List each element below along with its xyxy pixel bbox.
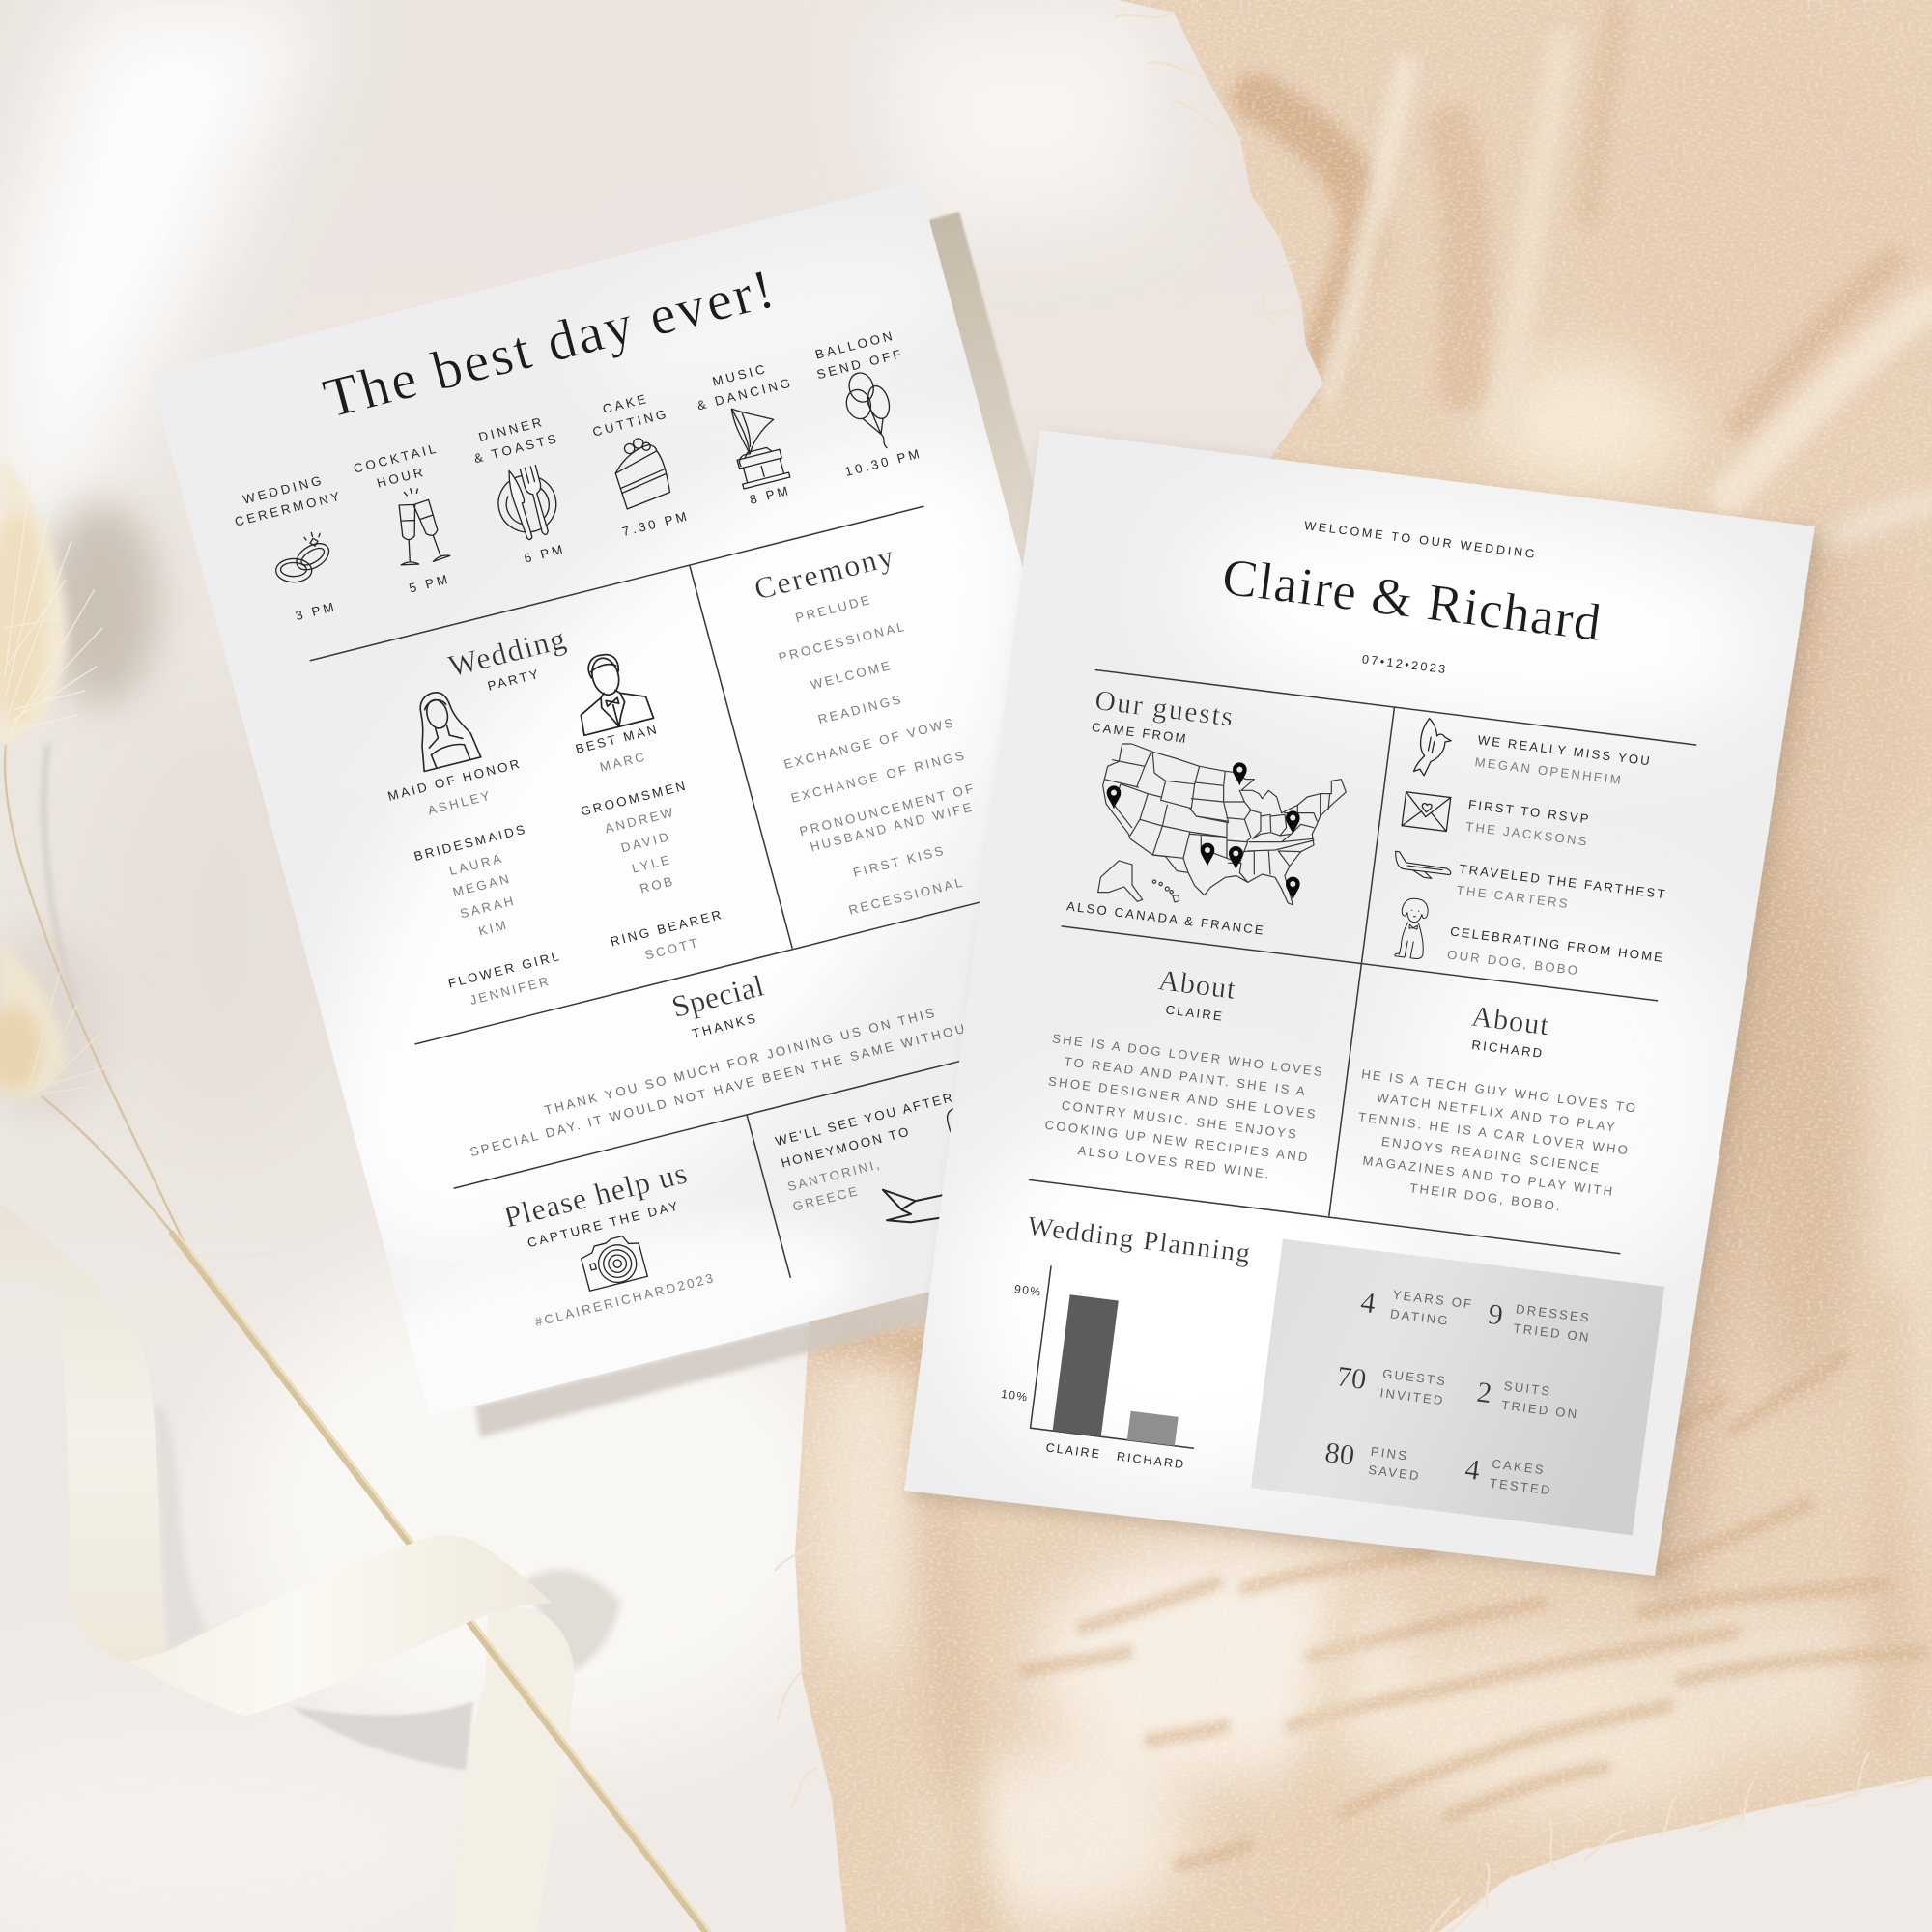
panel: guest superlatives: FIRST TO RSVP (1467, 797, 1592, 827)
panel: about claire: SHE IS A DOG LOVER WHO LOVES (1051, 1031, 1325, 1079)
panel: wedding stats box: TRIED ON (1513, 1321, 1591, 1345)
panel: about richard: MAGAZINES AND TO PLAY WITH (1362, 1153, 1615, 1199)
panel: wedding party: Wedding (444, 621, 571, 683)
step: balloon send off: SEND OFF (815, 346, 905, 382)
ribbon lower band (453, 1607, 575, 1932)
bar chart: CLAIRE (1045, 1441, 1102, 1462)
icon: dried pampas grass (0, 454, 190, 1256)
icon: bride (405, 686, 481, 772)
panel: about richard: HE IS A TECH GUY WHO LOVES TO (1360, 1066, 1638, 1116)
step: balloon send off: BALLOON (813, 328, 896, 362)
panel: ceremony: PROCESSIONAL (777, 619, 908, 665)
shadow of left card: right strip (923, 212, 1038, 580)
bar chart: RICHARD (1116, 1450, 1186, 1471)
heading (1213, 510, 1610, 695)
panel: ceremony: WELCOME (809, 658, 894, 693)
panel: capture the day: #CLAIRERICHARD2023 (533, 1270, 717, 1329)
panel: about claire: CONTRY MUSIC. SHE ENJOYS (1061, 1098, 1299, 1142)
panel: wedding party: FLOWER GIRL (446, 949, 563, 991)
icon: dog (1395, 897, 1430, 959)
panel: wedding party: KIM (477, 918, 510, 939)
panel: our guests: ALSO CANADA & FRANCE (1065, 898, 1266, 938)
heading: 07•12•2023 (1361, 652, 1448, 676)
step: music and dancing: 8 PM (748, 483, 792, 507)
step: cake cutting (586, 387, 697, 540)
panel: about richard: THEIR DOG, BOBO. (1408, 1180, 1563, 1214)
icon: camera (578, 1233, 647, 1291)
cloth weave texture (795, 0, 1932, 1932)
panel: honeymoon: GREECE (791, 1183, 861, 1214)
step: cake cutting: CAKE (601, 391, 650, 416)
bar chart (994, 1262, 1214, 1472)
panel: wedding stats box: YEARS OF (1392, 1287, 1474, 1312)
satin ribbon (0, 1204, 552, 1717)
panel: guest superlatives: WE REALLY MISS YOU (1477, 732, 1653, 769)
panel: about claire (1037, 952, 1336, 1186)
icon: envelope (1402, 792, 1451, 831)
card: claire and richard (904, 430, 1815, 1576)
panel: wedding stats box: DRESSES (1515, 1301, 1592, 1325)
panel: about claire: ALSO LOVES RED WINE. (1077, 1143, 1272, 1181)
panel: special thanks: Special (668, 969, 768, 1024)
panel: ceremony: HUSBAND AND WIFE (809, 799, 976, 854)
panel: wedding stats box: 80 (1323, 1435, 1356, 1472)
panel: ceremony: EXCHANGE OF VOWS (782, 715, 957, 772)
panel: special thanks: SPECIAL DAY. IT WOULD NOT HAVE BEEN THE SAME WITHOUT YOU. (469, 1007, 1024, 1159)
step: dinner and toasts: 6 PM (523, 542, 567, 566)
panel: special thanks (442, 909, 1024, 1159)
panel: about richard: ENJOYS READING SCIENCE (1380, 1134, 1602, 1176)
step: cake cutting: 7.30 PM (620, 508, 691, 539)
panel: wedding stats box: TESTED (1489, 1476, 1553, 1497)
panel: about claire: CLAIRE (1165, 1002, 1225, 1024)
shadow of left card: bottom strip (475, 1273, 1014, 1437)
icon: gramophone (723, 399, 790, 489)
step: cake cutting: CUTTING (591, 406, 670, 440)
panel: about claire: SHOE DESIGNER AND SHE LOVES (1047, 1074, 1319, 1122)
panel: wedding party: SCOTT (643, 935, 701, 962)
step: cocktail hour: COCKTAIL (352, 440, 440, 476)
panel: about claire: COOKING UP NEW RECIPIES AND (1044, 1118, 1311, 1165)
icon: dove (1413, 718, 1454, 779)
dried stems (172, 1234, 713, 1932)
panel: wedding stats box: CAKES (1492, 1457, 1547, 1477)
step: dinner and toasts (468, 412, 589, 571)
heading: Claire & Richard (1219, 547, 1605, 652)
step: cocktail hour: HOUR (375, 465, 427, 491)
panel: honeymoon: WE'LL SEE YOU AFTER OUR (774, 1080, 996, 1149)
panel: ceremony: PRONOUNCEMENT OF (798, 781, 978, 838)
panel: ceremony: READINGS (816, 692, 904, 726)
panel: wedding planning chart: Wedding Planning (1026, 1211, 1253, 1269)
cloth upper folds (1256, 13, 1932, 541)
icon: champagne flutes (383, 483, 450, 569)
step: wedding ceremony: WEDDING (242, 472, 326, 507)
panel: ceremony: EXCHANGE OF RINGS (789, 748, 968, 806)
panel: wedding party: RING BEARER (609, 907, 724, 949)
step: music and dancing: & DANCING (696, 375, 795, 412)
cloth fringe (776, 13, 1932, 1932)
panel: wedding stats box: 4 (1359, 1286, 1378, 1320)
step: balloon send off (810, 327, 931, 479)
panel: guest superlatives: THE CARTERS (1456, 883, 1571, 911)
panel: guest superlatives: CELEBRATING FROM HOME (1449, 924, 1665, 965)
panel: guest superlatives (1382, 717, 1691, 989)
shadow of right card (910, 437, 1821, 1582)
icon: cake slice (609, 434, 672, 509)
panel: about claire: TO READ AND PAINT. SHE IS A (1064, 1054, 1308, 1098)
panel: wedding party: LAURA (447, 851, 505, 878)
step: wedding ceremony: CERERMONY (233, 488, 344, 529)
step: wedding ceremony (228, 469, 372, 632)
step: dinner and toasts: DINNER (477, 414, 546, 444)
panel: about richard: TENNIS. HE IS A CAR LOVER WHO (1357, 1110, 1631, 1157)
map pins (1107, 762, 1300, 900)
panel: capture the day: CAPTURE THE DAY (526, 1198, 682, 1250)
card: the best day ever (163, 186, 1022, 1406)
panel: about richard (1347, 987, 1649, 1222)
panel: about richard: WATCH NETFLIX AND TO PLAY (1376, 1091, 1618, 1134)
panel: about richard: About (1470, 1000, 1551, 1041)
panel: wedding party: MARC (598, 749, 648, 775)
panel: wedding stats box: 9 (1486, 1297, 1505, 1332)
heading: WELCOME TO OUR WEDDING (1303, 519, 1538, 561)
panel: wedding planning chart (994, 1210, 1253, 1476)
panel: wedding stats box: GUESTS (1381, 1366, 1448, 1389)
panel: wedding stats box: DATING (1389, 1306, 1451, 1328)
panel: ceremony: FIRST KISS (852, 843, 947, 880)
panel: ceremony: Ceremony (751, 539, 899, 607)
icon: plate and cutlery (490, 462, 564, 545)
bar chart: 90% (1013, 1282, 1042, 1299)
step: cocktail hour (352, 440, 474, 601)
us map with pins (1098, 744, 1346, 905)
panel: wedding party: ANDREW (603, 805, 677, 836)
icon: airplane (1393, 851, 1453, 881)
panel: wedding stats box (1251, 1239, 1664, 1535)
panel: our guests: CAME FROM (1091, 720, 1189, 746)
title: The best day ever! (317, 256, 782, 430)
cloth highlights (798, 343, 1932, 1932)
panel: guest superlatives: OUR DOG, BOBO (1446, 947, 1580, 978)
step: dinner and toasts: & TOASTS (472, 431, 560, 466)
panel: wedding stats box: INVITED (1379, 1385, 1445, 1407)
panel: wedding stats box: TRIED ON (1500, 1398, 1579, 1422)
panel: about claire: About (1156, 963, 1238, 1006)
panel: ceremony (731, 534, 1000, 924)
panel: wedding stats box: 4 (1463, 1452, 1482, 1487)
icon: photo pin (945, 1108, 968, 1155)
step: balloon send off: 10.30 PM (843, 446, 923, 479)
step: music and dancing (691, 356, 822, 513)
plume shadows on the surface (0, 502, 159, 1121)
bar chart: 10% (1000, 1387, 1029, 1404)
panel: wedding party: GROOMSMEN (580, 778, 689, 819)
panel: wedding stats box: SAVED (1368, 1463, 1422, 1484)
icon: balloons (839, 368, 900, 455)
icon: rings (266, 529, 339, 590)
panel: wedding stats box: 70 (1335, 1360, 1368, 1396)
panel: honeymoon: SANTORINI, (785, 1156, 883, 1194)
panel: wedding stats box: PINS (1370, 1444, 1409, 1463)
panel: guest superlatives: THE JACKSONS (1464, 819, 1590, 849)
panel: wedding party (355, 602, 731, 1014)
panel: wedding party: PARTY (486, 667, 542, 694)
peach gauze cloth (795, 0, 1932, 1932)
panel: special thanks: THANKS (691, 1010, 759, 1040)
panel: wedding stats box: 2 (1475, 1376, 1493, 1409)
step: cocktail hour: 5 PM (408, 572, 452, 596)
panel: capture the day: Please help us (500, 1155, 692, 1234)
panel: guest superlatives: TRAVELED THE FARTHEST (1459, 862, 1667, 901)
panel: about richard: RICHARD (1471, 1037, 1545, 1061)
panel: wedding party: MAID OF HONOR (386, 756, 524, 804)
panel: wedding party: MEGAN (451, 871, 513, 899)
icon: groom (565, 646, 654, 735)
panel: honeymoon (774, 1080, 1023, 1252)
panel: wedding stats box: SUITS (1503, 1378, 1552, 1399)
ribbon shadows (153, 1406, 621, 1771)
panel: ceremony: RECESSIONAL (847, 874, 966, 918)
panel: wedding party: BEST MAN (574, 722, 661, 756)
panel: our guests (1065, 685, 1293, 938)
panel: wedding party: SARAH (459, 894, 517, 921)
panel: wedding party: JENNIFER (469, 974, 553, 1008)
step: music and dancing: MUSIC (711, 361, 769, 388)
timeline (227, 326, 933, 633)
icon: airplane (879, 1166, 989, 1231)
panel: honeymoon: HONEYMOON TO (780, 1124, 912, 1171)
panel: capture the day (500, 1155, 717, 1330)
panel: wedding party: ASHLEY (426, 787, 494, 817)
card 2 paper (904, 430, 1815, 1576)
map outline and states (1098, 744, 1346, 905)
panel: wedding party: BRIDESMAIDS (412, 821, 528, 864)
panel: ceremony: PRELUDE (794, 592, 873, 625)
panel: wedding party: DAVID (619, 829, 672, 855)
panel: wedding party: ROB (639, 873, 676, 896)
card 1 paper (150, 181, 1199, 1417)
panel: guest superlatives: MEGAN OPENHEIM (1474, 754, 1624, 787)
panel: wedding party: LYLE (630, 852, 673, 876)
cloth lower wrinkles (1024, 1356, 1922, 1864)
panel: special thanks: THANK YOU SO MUCH FOR JOINING US ON THIS (543, 1005, 938, 1118)
step: wedding ceremony: 3 PM (294, 599, 338, 623)
panel: our guests: Our guests (1094, 685, 1236, 733)
